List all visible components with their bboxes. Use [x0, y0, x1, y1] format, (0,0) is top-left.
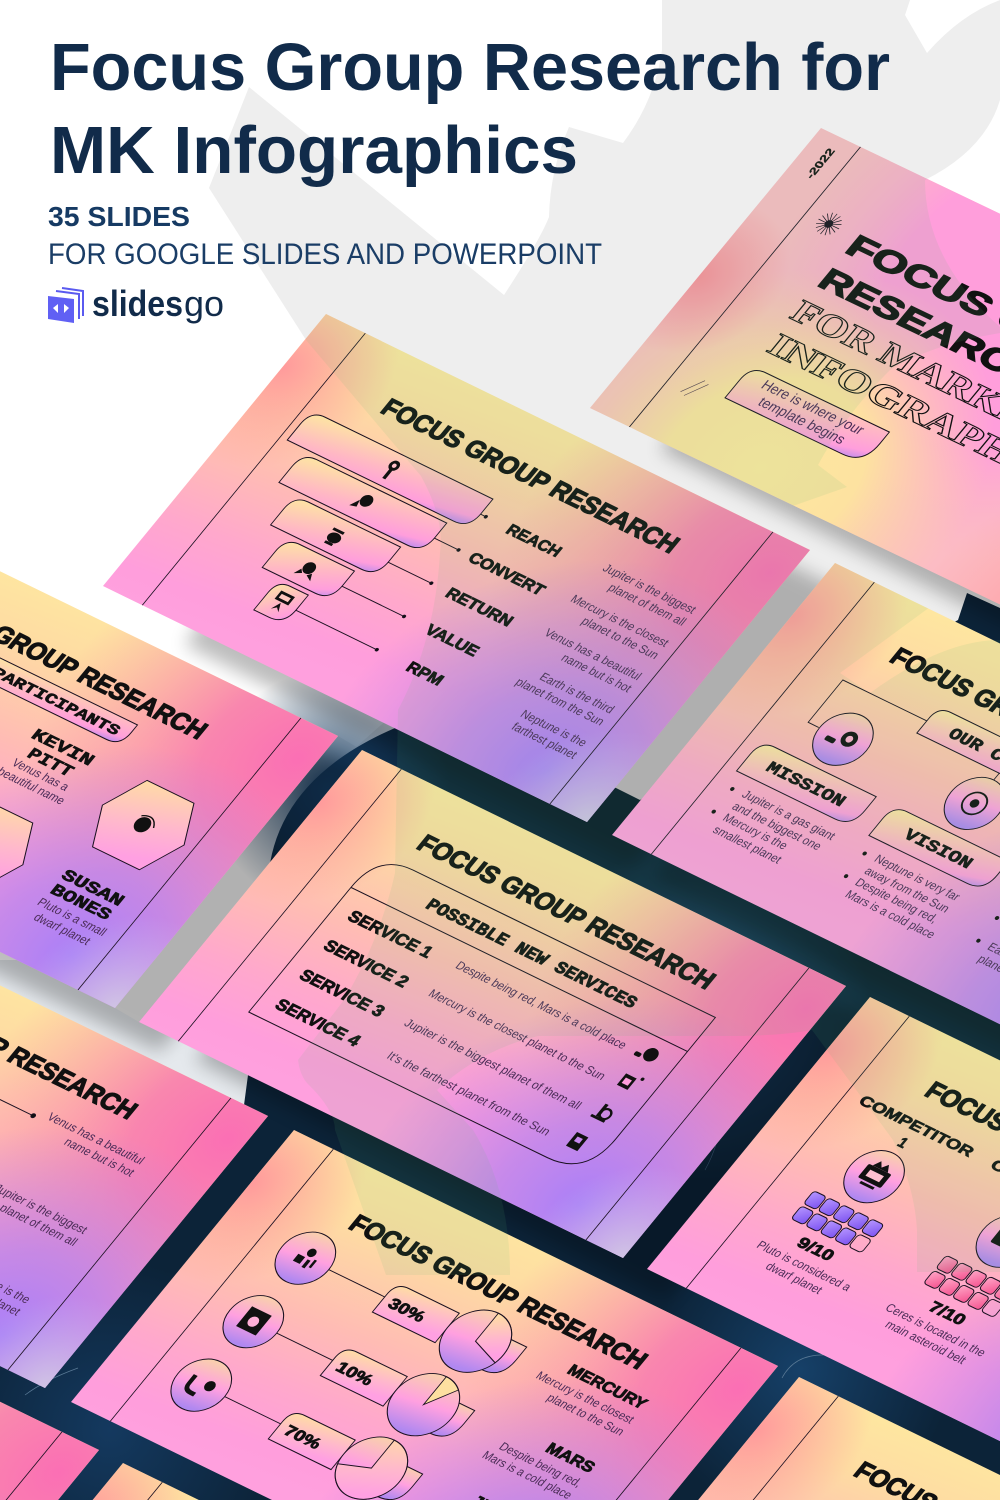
funnel descriptions: name but is hot — [558, 651, 636, 695]
30 percent pie — [425, 1300, 538, 1389]
services panel — [249, 853, 715, 1176]
main title: Focus Group Research for — [50, 30, 890, 105]
bracket connector — [808, 680, 1000, 803]
person: Kevin Pitt: KEVIN — [27, 726, 99, 770]
competitor 1 description: dwarf planet — [763, 1259, 826, 1297]
competitor 1 heading — [841, 1093, 978, 1177]
right column: Mars: Despite being red, — [496, 1439, 585, 1490]
slide: competitors — [647, 997, 1000, 1500]
70 percent pie — [321, 1427, 434, 1500]
funnel title: FOCUS GROUP RESEARCH — [375, 394, 685, 559]
right column: Mercury: planet to the Sun — [544, 1391, 628, 1438]
service names: SERVICE 4 — [271, 996, 365, 1051]
mission bullets: smallest planet — [710, 823, 786, 867]
subtitle: 35 SLIDES — [48, 201, 190, 232]
competitor 1 heading: 1 — [894, 1135, 911, 1152]
slide: pie charts — [71, 1130, 778, 1500]
slide: services — [139, 750, 846, 1258]
service names: SERVICE 3 — [295, 966, 388, 1021]
connector line and dot — [0, 1081, 37, 1118]
funnel labels: RPM — [402, 659, 447, 689]
icon: logo stack — [48, 288, 83, 323]
funnel icons — [266, 457, 406, 614]
funnel connector lines — [295, 476, 488, 652]
service descriptions — [377, 957, 633, 1142]
person: Susan Bones: Pluto is a small — [34, 895, 110, 939]
funnel labels: VALUE — [421, 622, 483, 660]
vision bullets: Despite being red, — [852, 875, 941, 926]
cover year label: -2022 — [804, 147, 838, 181]
vision box — [869, 805, 1000, 892]
service descriptions: Jupiter is the biggest planet of them all — [401, 1016, 585, 1112]
funnel descriptions: Earth is the third — [537, 670, 618, 716]
pale strip between slides — [0, 960, 250, 1200]
funnel descriptions: Neptune is the — [517, 707, 591, 750]
right column: Mercury: MERCURY — [563, 1362, 651, 1413]
vision bullets: Mars is a cold place — [842, 887, 939, 941]
slide: bottom right — [576, 1377, 1000, 1500]
subtitle: FOR GOOGLE SLIDES AND POWERPOINT — [48, 238, 602, 271]
right column: Mercury — [523, 1352, 651, 1439]
cover title solid lines: RESEARCH — [811, 262, 1000, 394]
slide: funnel — [103, 314, 810, 822]
translucent swirl overlay across slides — [298, 128, 1000, 1275]
cover note box: template begins — [755, 394, 849, 447]
right column text: name but is hot — [61, 1135, 138, 1180]
funnel descriptions: Mercury is the closest — [568, 592, 673, 650]
third column bullets — [962, 915, 1000, 1005]
slide: far bottom left — [0, 1214, 99, 1500]
funnel layers — [178, 411, 493, 661]
cover note box: Here is where your — [758, 377, 868, 438]
funnel descriptions: planet to the Sun — [578, 614, 662, 662]
subtitle — [48, 201, 602, 271]
funnel labels — [382, 516, 576, 699]
vision bullets: Neptune is very far — [871, 852, 963, 904]
competitor 2 rating squares — [923, 1255, 1000, 1317]
person: Susan Bones: BONES — [46, 881, 116, 925]
funnel descriptions: Jupiter is the biggest — [600, 561, 700, 617]
vision bullets: away from the Sun — [861, 864, 953, 915]
mission box: MISSION — [761, 758, 850, 811]
services panel heading: POSSIBLE NEW SERVICES — [420, 897, 641, 1013]
competitor 2 description: Ceres is located in the — [882, 1301, 989, 1360]
main title: MK Infographics — [50, 113, 578, 188]
slide: participants — [0, 500, 338, 1008]
funnel descriptions: Venus has a beautiful — [541, 626, 645, 683]
hexagon: right — [75, 772, 211, 878]
service descriptions: Mercury is the closest planet to the Sun — [425, 986, 609, 1083]
hexagon: left — [0, 792, 50, 898]
slidesgo logo — [48, 283, 224, 324]
slide: cover — [590, 128, 1000, 650]
decorative slashes — [679, 375, 710, 401]
funnel labels: REACH — [502, 522, 565, 561]
right column: Mercury: Mercury is the closest — [533, 1368, 638, 1427]
pie slide title: FOCUS GROUP RESEARCH — [343, 1210, 653, 1375]
vision bullets — [830, 846, 968, 941]
mission bullets: Jupiter is a gas giant — [739, 787, 839, 843]
slide: bottom centre — [0, 1463, 607, 1500]
70 percent label — [268, 1410, 355, 1470]
person: Kevin Pitt: PITT — [23, 745, 78, 781]
our company box — [917, 707, 1000, 811]
competitor 1 rating squares — [791, 1191, 884, 1253]
competitor 1 description: Pluto is considered a — [754, 1238, 855, 1294]
10 percent pie — [373, 1363, 486, 1452]
participants label — [0, 650, 137, 746]
cover title outlined lines: INFOGRAPHICS — [759, 328, 1000, 503]
grey band between participants and services slides — [115, 736, 362, 1022]
competitor 1 heading: COMPETITOR — [855, 1093, 978, 1161]
row connector lines — [225, 1270, 479, 1470]
person: Kevin Pitt: Venus has a — [9, 756, 73, 794]
person: Susan Bones: SUSAN — [57, 866, 128, 910]
10 percent label — [320, 1346, 407, 1406]
person: Kevin Pitt — [0, 724, 102, 808]
funnel labels: RETURN — [442, 585, 517, 630]
funnel labels: CONVERT — [464, 550, 549, 599]
row 2 icon circle — [211, 1287, 296, 1357]
competitor 2 description: main asteroid belt — [882, 1317, 970, 1367]
slide: mission and vision — [612, 563, 1000, 1071]
funnel descriptions: planet from the Sun — [512, 675, 608, 728]
right column text: Venus has a beautiful — [44, 1110, 148, 1167]
service descriptions: It's the farthest planet from the Sun — [384, 1049, 554, 1138]
vision box: VISION — [899, 825, 977, 873]
logo wordmark: slides — [92, 283, 183, 324]
logo wordmark: go — [184, 283, 224, 324]
mission bullets: Mercury is the — [720, 811, 791, 853]
10 percent label: 10% — [332, 1359, 377, 1389]
funnel descriptions: planet of them all — [605, 581, 689, 629]
70 percent label: 70% — [280, 1422, 325, 1453]
cover title outlined lines — [756, 294, 1000, 511]
slide: venus text fragment — [0, 880, 268, 1388]
person: Susan Bones — [24, 865, 134, 951]
cover title solid lines — [811, 229, 1000, 433]
vision circle — [932, 769, 1000, 838]
service descriptions: Despite being red, Mars is a cold place — [453, 958, 630, 1052]
grey swirl background shape — [209, 0, 1000, 1000]
person: Susan Bones: dwarf planet — [31, 910, 94, 948]
competitor 2 circle — [964, 1206, 1000, 1276]
competitor 1 circle — [831, 1142, 917, 1212]
mission bullets — [698, 781, 839, 879]
services title: FOCUS GROUP RESEARCH — [411, 830, 721, 995]
mission box — [737, 741, 876, 827]
mission bullets: and the biggest one — [729, 799, 825, 853]
right column text — [0, 1110, 148, 1319]
competitor 1 score: 9/10 — [793, 1234, 838, 1265]
funnel descriptions: farthest planet — [509, 720, 581, 762]
row 3 icon circle — [159, 1350, 244, 1420]
row 1 icon circle — [263, 1223, 348, 1293]
dark navy background — [0, 593, 1000, 1500]
main title — [50, 30, 890, 188]
icon: starburst — [810, 209, 847, 239]
slide drop shadows — [0, 175, 1000, 1300]
service names: SERVICE 2 — [319, 937, 413, 991]
service icons — [561, 1042, 666, 1154]
30 percent label: 30% — [384, 1296, 429, 1326]
funnel descriptions — [476, 559, 700, 762]
mission circle — [800, 704, 886, 774]
right column: Mars: MARS — [542, 1440, 599, 1476]
service names — [271, 907, 438, 1051]
30 percent label — [372, 1283, 459, 1343]
service names: SERVICE 1 — [344, 907, 437, 962]
competitor 2 score: 7/10 — [925, 1299, 969, 1329]
right column: Mars — [479, 1420, 599, 1500]
cover note box — [725, 366, 889, 464]
